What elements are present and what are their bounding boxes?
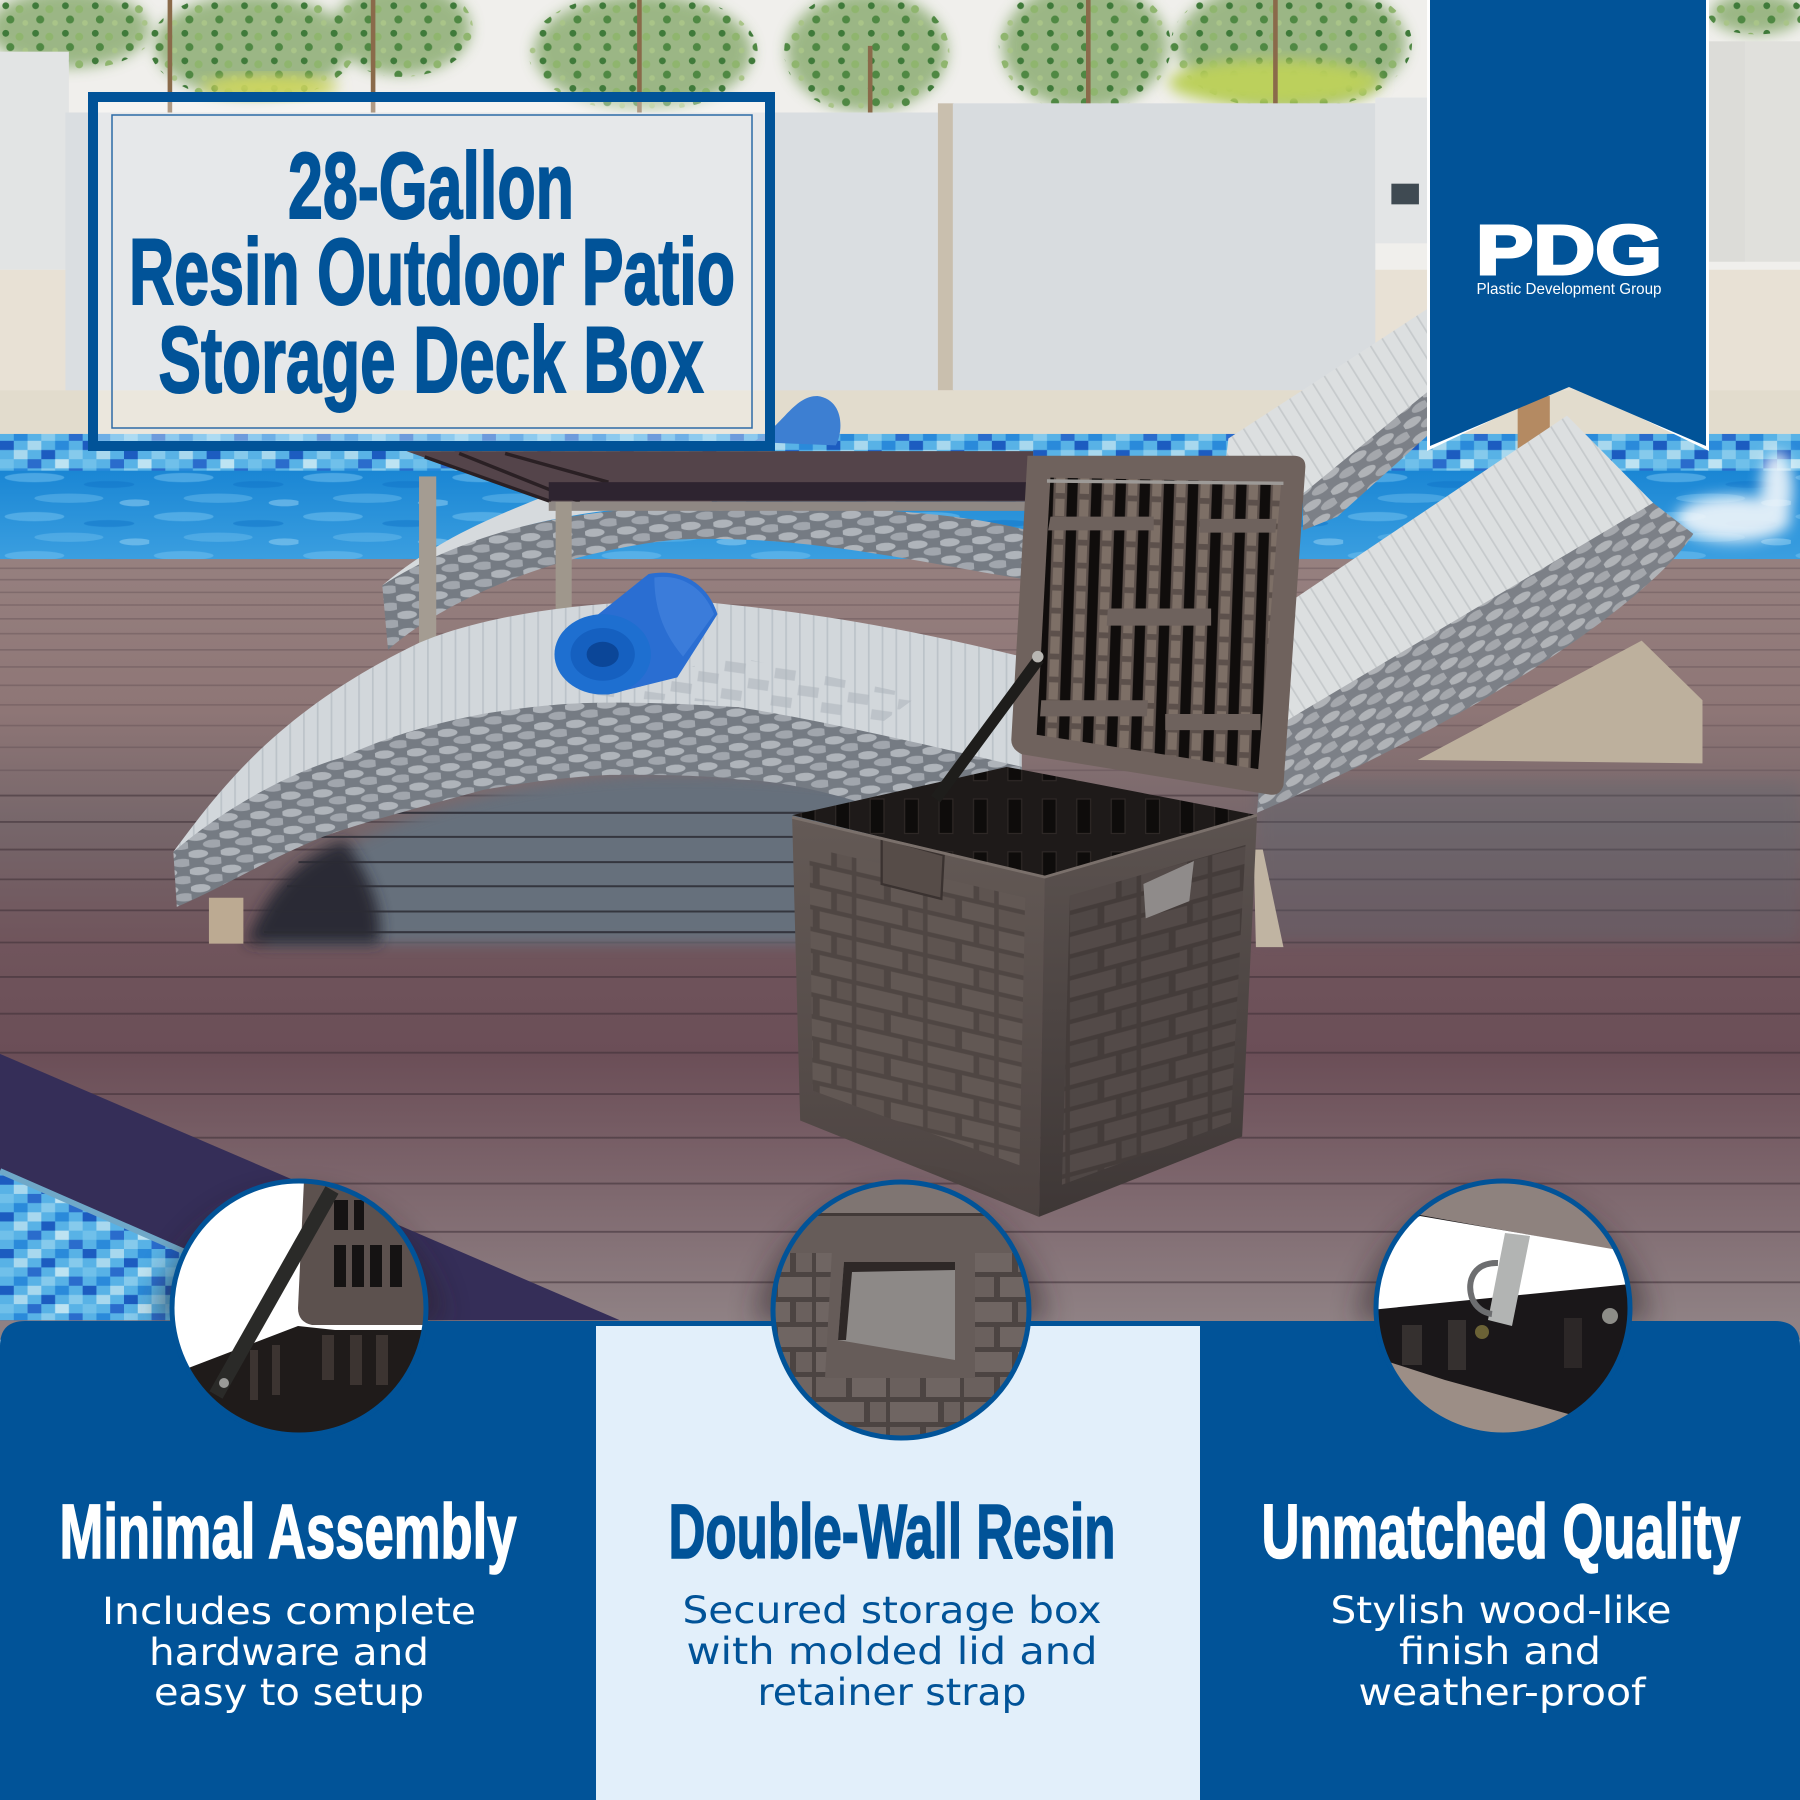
box front face [792, 817, 1045, 1217]
planters and paving [0, 41, 1800, 436]
description: finish and [1399, 1630, 1601, 1673]
description [102, 1590, 476, 1714]
description: weather-proof [1358, 1671, 1647, 1714]
description: retainer strap [758, 1671, 1026, 1714]
icon: handle detail circle [770, 1175, 1032, 1445]
lounger right section [1257, 416, 1693, 813]
back towel [752, 396, 840, 445]
box lid [1011, 456, 1305, 795]
lounger left section [173, 601, 1022, 907]
description [682, 1589, 1102, 1714]
wooden deck [0, 559, 1800, 1340]
strap [936, 659, 1039, 799]
background pool scene [0, 0, 1800, 1340]
logo: PDG [1476, 211, 1662, 289]
description: with molded lid and [686, 1630, 1098, 1673]
panel: double-wall resin background [596, 1321, 1200, 1800]
feature: minimal assembly [60, 1489, 517, 1714]
icon: hinge ring detail circle [1370, 1175, 1640, 1445]
trees [0, 0, 1800, 114]
concrete lounger base [1418, 641, 1702, 763]
description: hardware and [149, 1631, 429, 1674]
shadow under front lounger [247, 775, 1800, 944]
box interior [792, 767, 1257, 877]
back wall [0, 0, 1800, 276]
title text [129, 133, 735, 412]
panel: unmatched quality background [1200, 1321, 1800, 1800]
title panel [93, 97, 770, 446]
back lounger [382, 308, 1429, 650]
open deck box [792, 456, 1305, 1217]
title text: Resin Outdoor Patio [129, 219, 735, 324]
box right face [1039, 815, 1257, 1217]
description: easy to setup [154, 1671, 424, 1714]
icon: strap detail circle [170, 1180, 430, 1440]
logo: Plastic Development Group [1476, 281, 1662, 298]
bottom panels [0, 1321, 1800, 1800]
front lounger [173, 416, 1693, 947]
logo ribbon [1427, 0, 1709, 451]
description: Stylish wood-like [1330, 1589, 1672, 1632]
heading: Double-Wall Resin [668, 1489, 1116, 1575]
pool corner at deck edge [0, 1054, 620, 1320]
description [1330, 1589, 1672, 1714]
description: Secured storage box [682, 1589, 1102, 1632]
title text: 28-Gallon [288, 133, 574, 238]
description: Includes complete [102, 1590, 476, 1633]
feature: unmatched quality [1262, 1489, 1741, 1714]
pool water and tile band [0, 396, 1800, 560]
circle halos [155, 1194, 1649, 1321]
table [406, 451, 1042, 649]
title text: Storage Deck Box [158, 307, 704, 412]
heading: Minimal Assembly [60, 1489, 517, 1575]
rolled towel [554, 573, 718, 695]
feature: double-wall resin [668, 1489, 1116, 1714]
panel: minimal assembly background [0, 1321, 596, 1800]
